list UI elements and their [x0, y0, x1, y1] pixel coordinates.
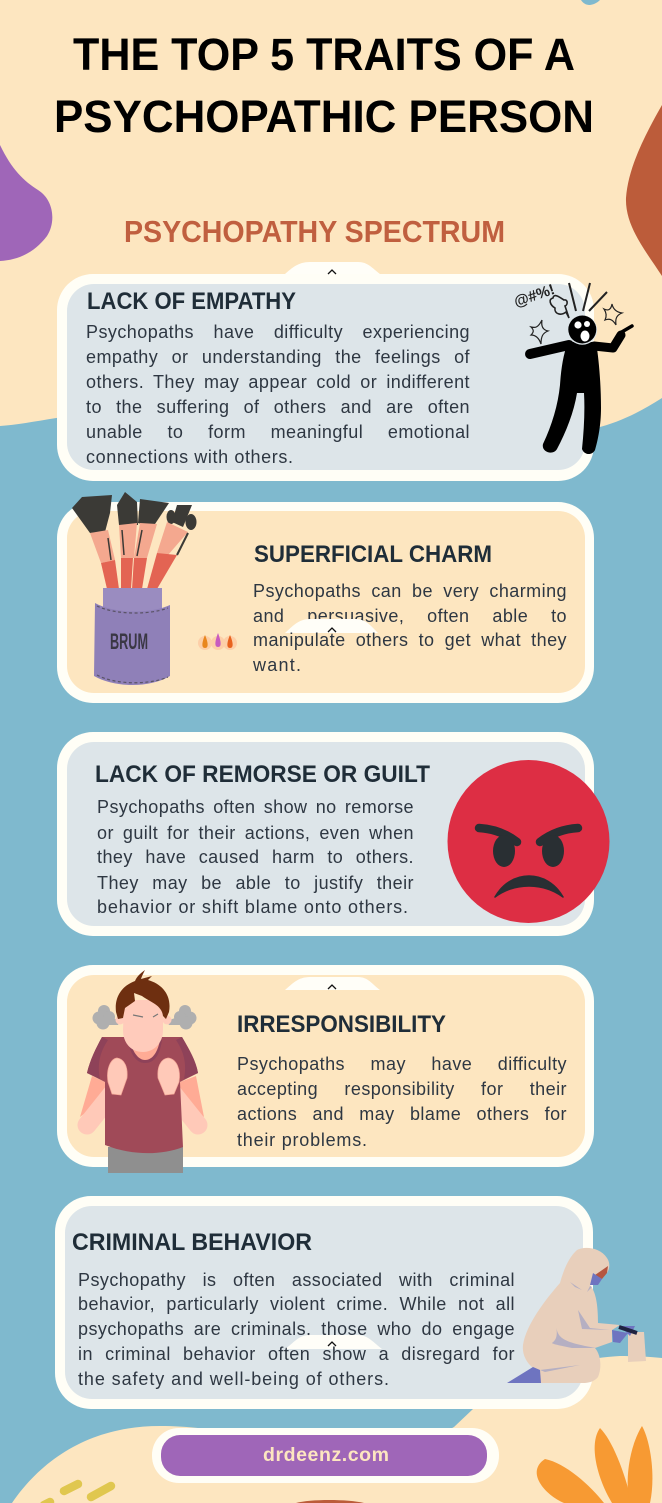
icon: makeup brushes in jar: BRUM — [110, 629, 148, 654]
panel: criminal behavior: in criminal behavior often show a disregard for — [78, 1344, 515, 1364]
panel: irresponsibility — [57, 965, 594, 1167]
panel: lack of empathy — [57, 262, 594, 481]
panel: superficial charm: and persuasive, often able to — [253, 606, 567, 626]
icon: kneeling figure in protective suit — [507, 1248, 646, 1383]
panel: lack of remorse or guilt: They may be able to justify their — [97, 873, 414, 893]
icon: orange leaves — [537, 1426, 652, 1503]
panel: irresponsibility: actions and may blame others for — [237, 1104, 567, 1124]
icon: three small drops — [198, 633, 237, 650]
icon: makeup brushes in jar — [72, 492, 196, 685]
panel: superficial charm: SUPERFICIAL CHARM — [254, 541, 492, 568]
panel: lack of remorse or guilt: they have caused harm to others. — [97, 847, 414, 867]
panel: criminal behavior: Psychopathy is often associated with criminal — [78, 1270, 515, 1290]
panel: lack of empathy: empathy or understanding the feelings of — [86, 347, 470, 367]
panel: irresponsibility: IRRESPONSIBILITY — [237, 1011, 446, 1038]
panel: superficial charm: Psychopaths can be very charming — [253, 581, 567, 601]
panel: irresponsibility: their problems. — [237, 1130, 367, 1150]
panel: lack of remorse or guilt: LACK OF REMORSE OR GUILT — [95, 761, 430, 788]
panel: irresponsibility: accepting responsibility for their — [237, 1079, 567, 1099]
panel: superficial charm — [57, 502, 594, 703]
icon: angry man with steam — [80, 970, 204, 1173]
title: THE TOP 5 TRAITS OF A — [73, 29, 575, 80]
panel: criminal behavior: behavior, particularly violent crime. While not all — [78, 1294, 515, 1314]
panel: irresponsibility: Psychopaths may have difficulty — [237, 1054, 567, 1074]
title — [54, 29, 594, 142]
footer pill: drdeenz.com — [263, 1444, 389, 1466]
footer pill — [152, 1428, 499, 1483]
panel: lack of remorse or guilt: behavior or shift blame onto others. — [97, 897, 408, 917]
panel: lack of remorse or guilt: or guilt for their actions, even when — [97, 823, 414, 843]
panel: lack of empathy: to the suffering of others and are often — [86, 397, 470, 417]
panel: criminal behavior: CRIMINAL BEHAVIOR — [72, 1229, 312, 1256]
panel: criminal behavior — [55, 1196, 593, 1409]
panel: superficial charm: manipulate others to get what they — [253, 630, 567, 650]
panel: lack of empathy: unable to form meaningful emotional — [86, 422, 470, 442]
icon: shouting stick figure: @#%! — [512, 281, 557, 311]
panel: criminal behavior: the safety and well-being of others. — [78, 1369, 389, 1389]
panel: lack of empathy: Psychopaths have difficulty experiencing — [86, 322, 470, 342]
panel: lack of empathy: connections with others. — [86, 447, 293, 467]
title: PSYCHOPATHIC PERSON — [54, 91, 594, 142]
icon: shouting stick figure — [512, 281, 632, 454]
subtitle: psychopathy spectrum: PSYCHOPATHY SPECTRUM — [124, 214, 505, 249]
panel: lack of empathy: others. They may appear cold or indifferent — [86, 372, 470, 392]
panel: criminal behavior: psychopaths are criminals, those who do engage — [78, 1319, 515, 1339]
icon: yellow dashes — [44, 1484, 111, 1503]
panel: lack of remorse or guilt — [57, 732, 594, 936]
panel: lack of remorse or guilt: Psychopaths often show no remorse — [97, 797, 414, 817]
panel: lack of empathy: LACK OF EMPATHY — [87, 288, 296, 315]
icon: angry face — [448, 760, 610, 923]
panel: superficial charm: want. — [252, 655, 301, 675]
